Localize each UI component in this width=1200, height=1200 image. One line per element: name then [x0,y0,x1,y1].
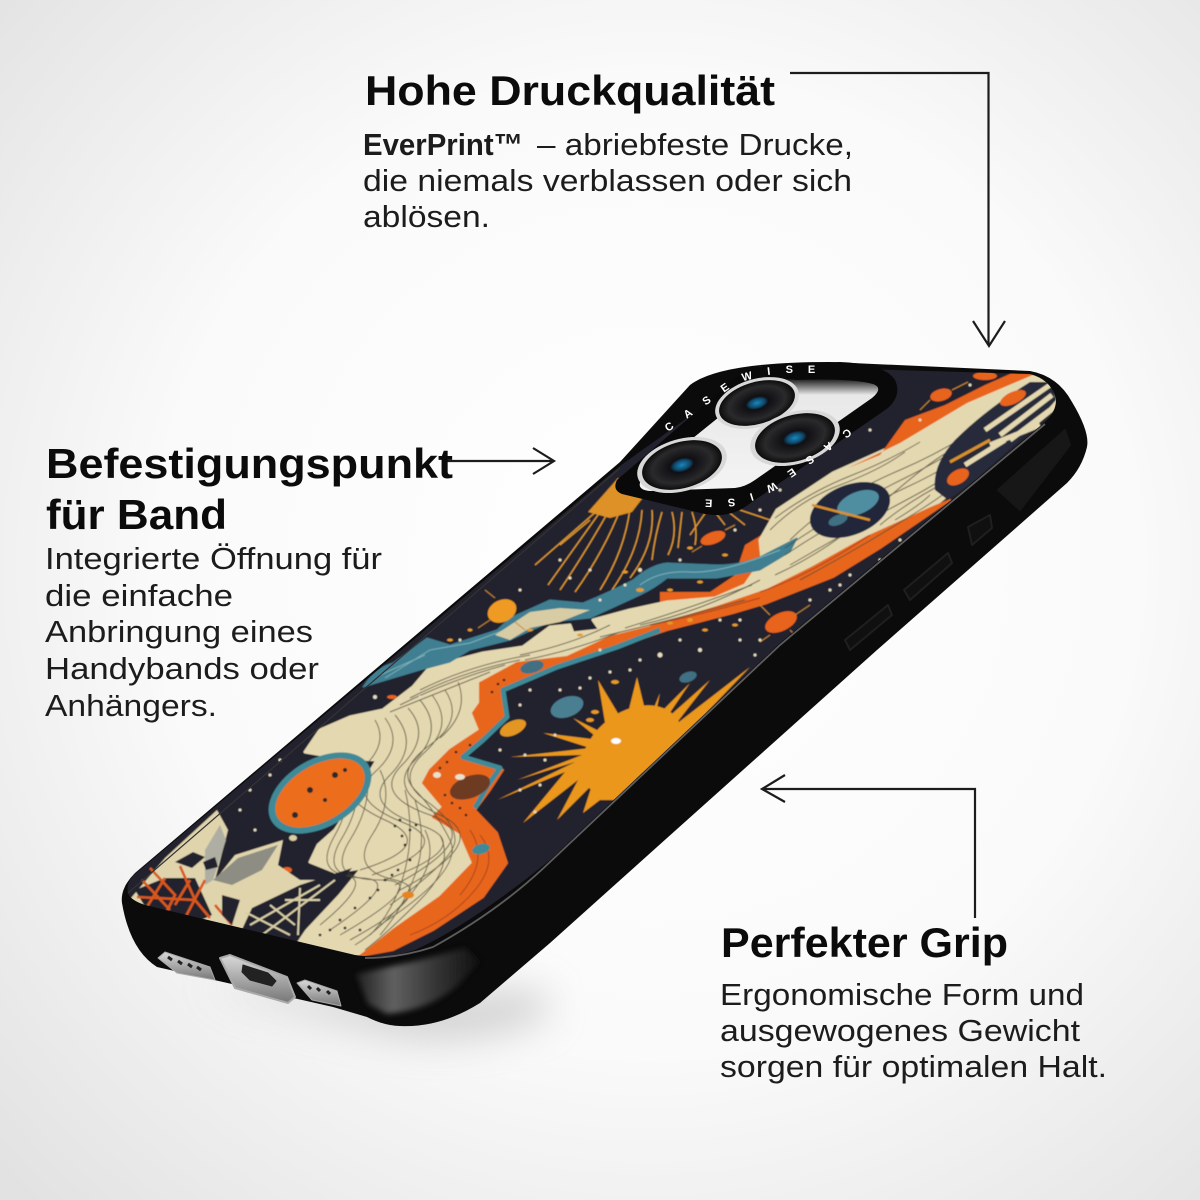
mountains bottom left [125,810,352,945]
body: grip: ausgewogenes Gewicht [720,1014,1081,1048]
body: grip: Ergonomische Form und [720,978,1084,1012]
speckles on orange river [439,679,505,816]
body: strap attachment [45,542,382,723]
text block: grip [720,919,1107,1084]
teal edge of orange river [463,630,660,808]
orange planet with teal ring [268,752,372,834]
body: print quality: die niemals verblassen oder sich [363,164,852,198]
teal wave stripes [380,550,780,678]
camera bump [615,362,898,516]
contour lines on river [320,441,952,951]
heading: grip: Perfekter Grip [721,919,1008,966]
teal river [363,538,797,687]
body: strap attachment: Integrierte Öffnung für [45,542,382,576]
sun glow behind camera [588,478,645,518]
orange dots [387,546,738,722]
arrow: strap attachment [447,448,554,474]
text block: strap attachment [45,440,453,723]
corner gloss highlight [356,948,480,1014]
heading: strap attachment: für Band [46,491,227,538]
brand ring text [665,366,851,508]
side buttons [845,430,1070,650]
body: grip [720,978,1107,1084]
dotted marks on river [319,819,417,936]
body: strap attachment: Handybands oder [45,652,319,686]
heading: strap attachment: Befestigungspunkt [46,440,453,487]
lens: right [744,400,846,476]
lens: top [709,368,805,438]
heading: print quality: Hohe Druckqualität [365,67,775,114]
top orange band [848,373,1035,468]
print artwork [128,366,1056,956]
lens: left [631,427,733,503]
right speaker grille [297,980,341,1006]
body: print quality: EverPrint™ [363,128,523,162]
arrow: print quality [790,73,1005,346]
left speaker grille [158,952,215,980]
case body [122,362,1087,1026]
body: strap attachment: Anhängers. [45,689,217,723]
body: print quality: – abriebfeste Drucke, [537,128,853,162]
camera glass [640,379,878,491]
stars [238,384,972,832]
body: strap attachment: die einfache [45,579,233,613]
striped planet [935,382,1056,500]
body: strap attachment: Anbringung eines [45,615,313,649]
brand ring text: CASEWISE [706,430,851,508]
body: print quality: ablösen. [363,200,490,234]
arrow: grip [762,775,975,918]
phone case [122,362,1088,1026]
small planets [282,372,997,898]
brand ring text: CASEWISE [665,366,815,430]
upper orange band [659,535,761,602]
charging port [220,955,295,1003]
orange river flow lines [410,535,870,935]
burst rays on small suns [478,382,968,642]
cream river [293,375,1065,956]
sun speckles [611,738,621,744]
text block: print quality [363,67,853,234]
phone shadow [200,985,550,1038]
body: print quality [363,128,853,234]
heading: strap attachment [46,440,453,538]
bump frame [615,362,897,515]
big orange sun [497,667,750,823]
body: grip: sorgen für optimalen Halt. [720,1050,1107,1084]
cream wisps on teal river [495,608,590,640]
lower orange river [360,500,950,956]
face rim highlight [365,424,1045,958]
ringed small planet [809,482,891,539]
bottom ports [158,952,341,1006]
top sun rays [535,505,770,592]
